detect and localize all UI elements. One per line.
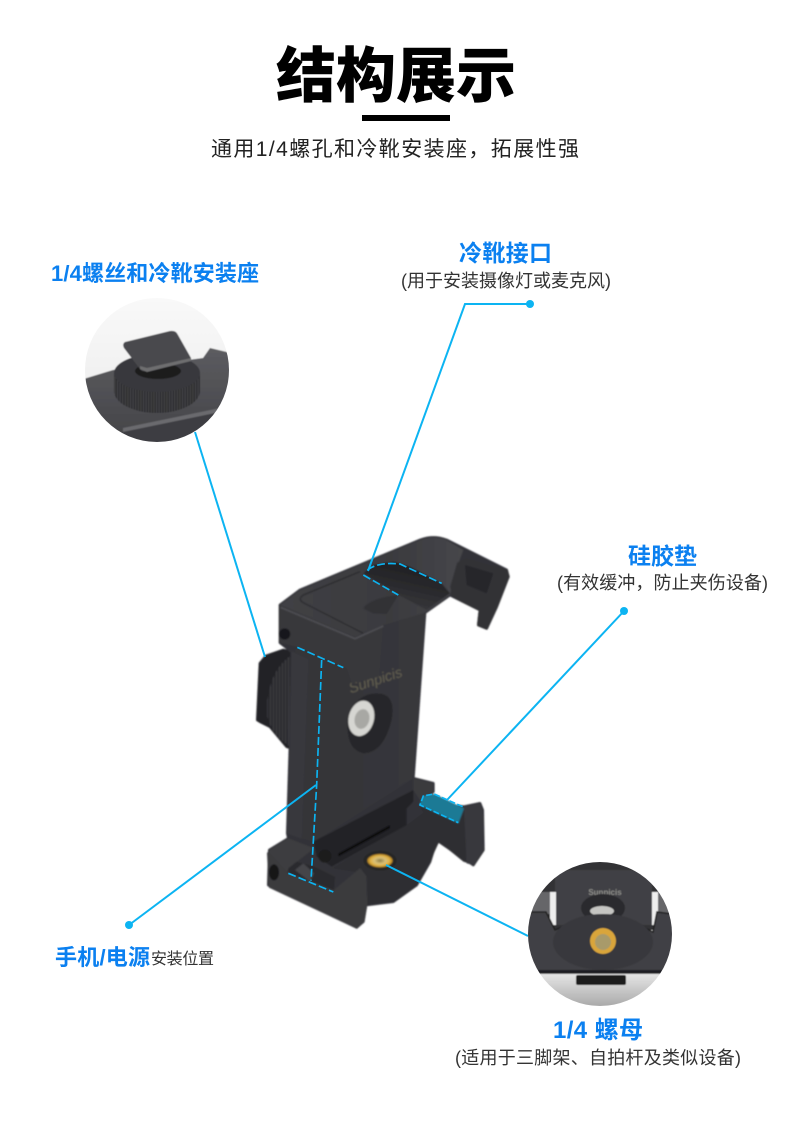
mount plate xyxy=(86,348,229,434)
neck xyxy=(135,366,181,379)
body left strip xyxy=(287,652,308,838)
screw hole on head xyxy=(279,628,290,640)
top body xyxy=(541,862,659,931)
clamp recess xyxy=(363,562,450,610)
front base xyxy=(520,912,680,973)
screw hole on lower jaw xyxy=(269,864,279,880)
inset: shoe mount xyxy=(85,320,229,442)
shoe foot xyxy=(123,331,191,371)
lower left jaw top xyxy=(269,838,314,873)
silicone pad xyxy=(419,794,464,823)
body main panel xyxy=(287,613,425,842)
screw slot xyxy=(581,894,625,916)
product photo: phone clamp xyxy=(257,537,508,927)
knob behind clamp xyxy=(257,650,298,750)
foot xyxy=(576,975,626,985)
mount slot xyxy=(347,693,393,753)
brass nut xyxy=(590,928,616,954)
label: 1/4 nut: 1/4 螺母 xyxy=(553,1017,643,1044)
head front edge highlight xyxy=(281,607,383,639)
dashed markers xyxy=(288,563,463,892)
lower right block xyxy=(413,778,433,800)
inset: 1/4 nut xyxy=(528,862,672,1006)
logo text: Sunpicis xyxy=(347,665,405,697)
latch xyxy=(363,595,398,614)
leader lines xyxy=(125,300,628,936)
label: cold shoe: 冷靴接口 xyxy=(459,240,552,266)
head top surface xyxy=(280,537,463,637)
label: silicone pad: 硅胶垫 xyxy=(628,543,697,569)
title underline xyxy=(362,115,450,121)
raised plate outline xyxy=(300,572,363,633)
label: 1/4 nut: (适用于三脚架、自拍杆及类似设备) xyxy=(455,1048,741,1068)
hex bolt xyxy=(345,698,378,739)
label: 1/4 nut xyxy=(455,1017,741,1068)
clamp silhouette xyxy=(268,537,508,927)
lower rail xyxy=(313,790,413,867)
lower right jaw xyxy=(419,803,483,865)
brass nut xyxy=(363,851,397,871)
knurled ring xyxy=(114,372,200,413)
lower left well xyxy=(288,862,335,892)
label: cold shoe: (用于安装摄像灯或麦克风) xyxy=(401,271,611,291)
lower left jaw front xyxy=(268,853,366,927)
base disc xyxy=(332,810,440,905)
head front face xyxy=(280,605,383,683)
logo: Sunpicis xyxy=(588,888,622,897)
title: 结构展示 xyxy=(276,43,516,110)
label: cold shoe xyxy=(401,240,611,291)
label: phone / power: 手机/电源 xyxy=(55,945,150,970)
label: phone / power xyxy=(55,945,214,970)
label: silicone pad: (有效缓冲，防止夹伤设备) xyxy=(557,573,768,593)
label: phone / power: 安装位置 xyxy=(151,950,214,968)
upper jaw arm xyxy=(452,560,508,628)
label: shoe mount: 1/4螺丝和冷靴安装座 xyxy=(51,261,259,286)
subtitle: 通用1/4螺孔和冷靴安装座，拓展性强 xyxy=(211,138,579,161)
label: silicone pad xyxy=(557,543,768,593)
silver clip edges xyxy=(550,892,556,925)
